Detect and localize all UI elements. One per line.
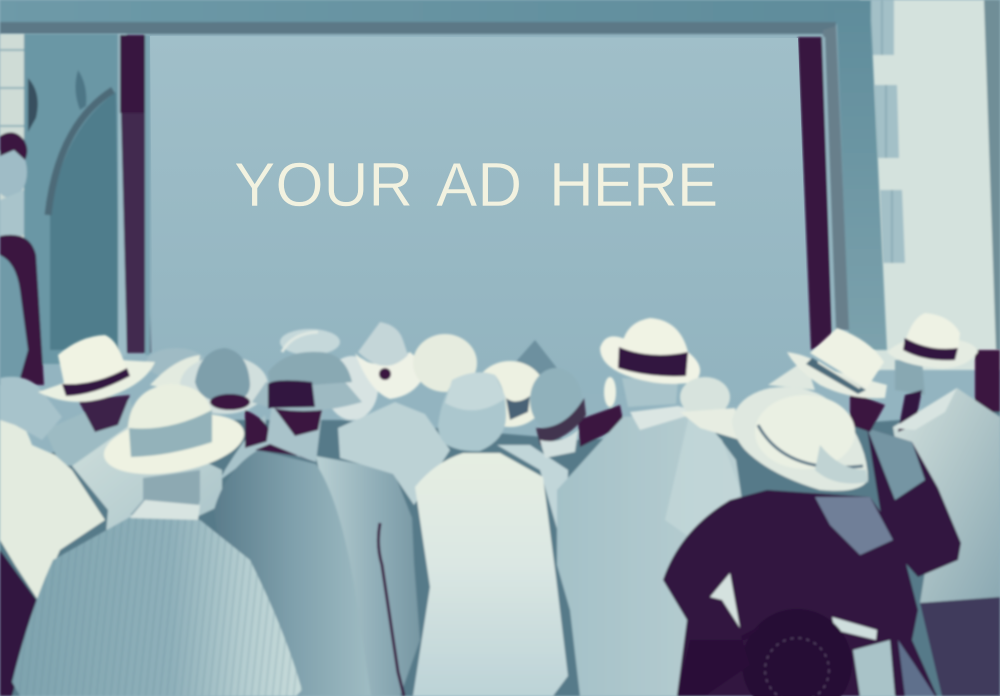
- figure: woman in dark coat: [663, 490, 937, 696]
- figure: man pale jacket centre: [338, 402, 450, 505]
- hat: blue cloche: [530, 368, 586, 458]
- figure: man far right: [893, 360, 1000, 696]
- back hats left: [146, 329, 340, 395]
- crowd base: [0, 400, 1000, 696]
- hat: fedora centre left: [355, 322, 427, 399]
- figure: dark suited man right: [850, 392, 961, 577]
- figure: man in tan jacket behind: [316, 456, 420, 696]
- crowd: [0, 313, 1000, 696]
- figure: back small hats centre: [513, 340, 624, 447]
- figure: man in grey jacket: [214, 405, 371, 696]
- figure: woman in white coat: [413, 453, 568, 696]
- figure: jacket behind woman: [497, 445, 568, 560]
- painted woman: [0, 132, 44, 385]
- figure: pale jacket left: [72, 410, 272, 545]
- plum post behind far right: [975, 350, 1000, 412]
- background building: [860, 0, 1000, 370]
- hat: small pale brim: [474, 361, 546, 427]
- hat: fedora gray: [180, 348, 268, 414]
- headline: HERE: [549, 151, 717, 220]
- waist highlights: [832, 617, 877, 640]
- hat: large boater front: [99, 384, 249, 484]
- hat: striped boater right: [787, 328, 887, 398]
- figure: man centre right jacket: [557, 378, 742, 696]
- hat: woven wide brim: [732, 387, 868, 491]
- building windows: [870, 0, 905, 263]
- hat: boater far left: [38, 335, 155, 402]
- figure: man in pinstripe jacket foreground: [12, 470, 302, 696]
- hat: boater far right: [887, 313, 978, 368]
- pale hats behind woman: [680, 360, 815, 440]
- hat: cloche white coat: [438, 372, 506, 451]
- billboard frame: [0, 0, 887, 350]
- hat: dark fedora: [252, 352, 378, 420]
- headline: YOUR: [234, 151, 413, 220]
- hat: pale dome: [413, 334, 477, 392]
- round handbag: [742, 609, 852, 696]
- hat: boater centre right: [600, 318, 700, 384]
- headline: AD: [436, 151, 522, 220]
- blank ad screen: [150, 36, 811, 410]
- figure: woman in white left: [0, 377, 105, 696]
- left poster panel: [0, 34, 151, 385]
- figure: man behind left: [45, 395, 150, 470]
